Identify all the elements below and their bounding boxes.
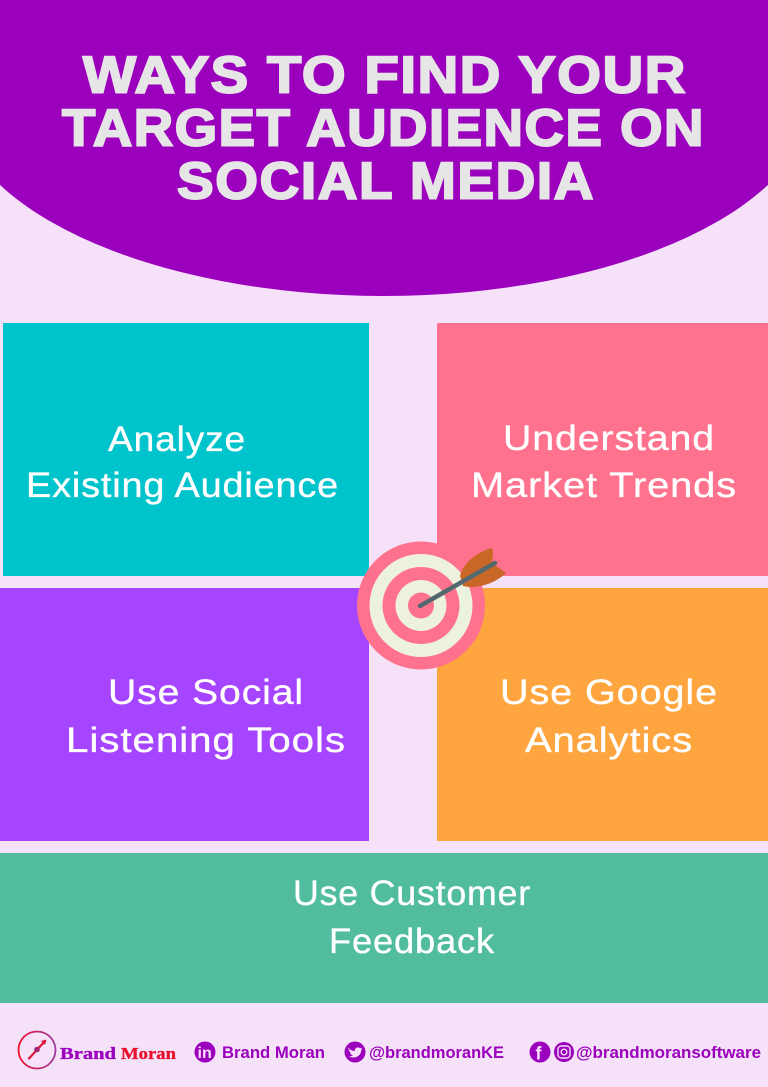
footer: facebook and instagram: @brandmoransoftware bbox=[576, 1043, 761, 1062]
panel: use google analytics: Use Google bbox=[500, 672, 718, 712]
panel: analyze existing audience bbox=[3, 323, 369, 576]
panel: understand market trends: Understand bbox=[503, 418, 715, 458]
panel: use customer feedback: Use Customer bbox=[293, 873, 531, 913]
panel: use social listening tools: Listening Tools bbox=[66, 720, 346, 760]
title: WAYS TO FIND YOUR bbox=[83, 46, 687, 104]
footer logo: Brand Moran bbox=[18, 1032, 177, 1068]
footer: linkedin: in bbox=[198, 1045, 212, 1062]
panel: understand market trends: Market Trends bbox=[471, 465, 737, 505]
footer logo: Brand Moran: Brand bbox=[60, 1044, 117, 1063]
title bbox=[62, 46, 705, 210]
panel: use google analytics bbox=[437, 588, 768, 841]
panel: analyze existing audience: Analyze bbox=[108, 419, 246, 459]
footer: twitter: @brandmoranKE bbox=[369, 1043, 504, 1062]
footer: facebook and instagram bbox=[530, 1042, 761, 1064]
icon: target with arrow bbox=[357, 542, 506, 670]
panel: analyze existing audience: Existing Audience bbox=[26, 465, 339, 505]
panel: understand market trends bbox=[437, 323, 768, 576]
header arc bbox=[0, 0, 768, 296]
title: TARGET AUDIENCE ON bbox=[62, 100, 705, 158]
panel: use social listening tools bbox=[0, 588, 369, 841]
footer: facebook and instagram: f bbox=[536, 1044, 542, 1064]
footer logo: Brand Moran: Moran bbox=[121, 1044, 177, 1063]
panel: use google analytics: Analytics bbox=[525, 720, 693, 760]
panel: use customer feedback: Feedback bbox=[329, 921, 495, 961]
title: SOCIAL MEDIA bbox=[177, 152, 595, 210]
panel: use social listening tools: Use Social bbox=[108, 672, 304, 712]
panel: use customer feedback bbox=[0, 853, 768, 1003]
footer: linkedin: Brand Moran bbox=[222, 1043, 325, 1062]
